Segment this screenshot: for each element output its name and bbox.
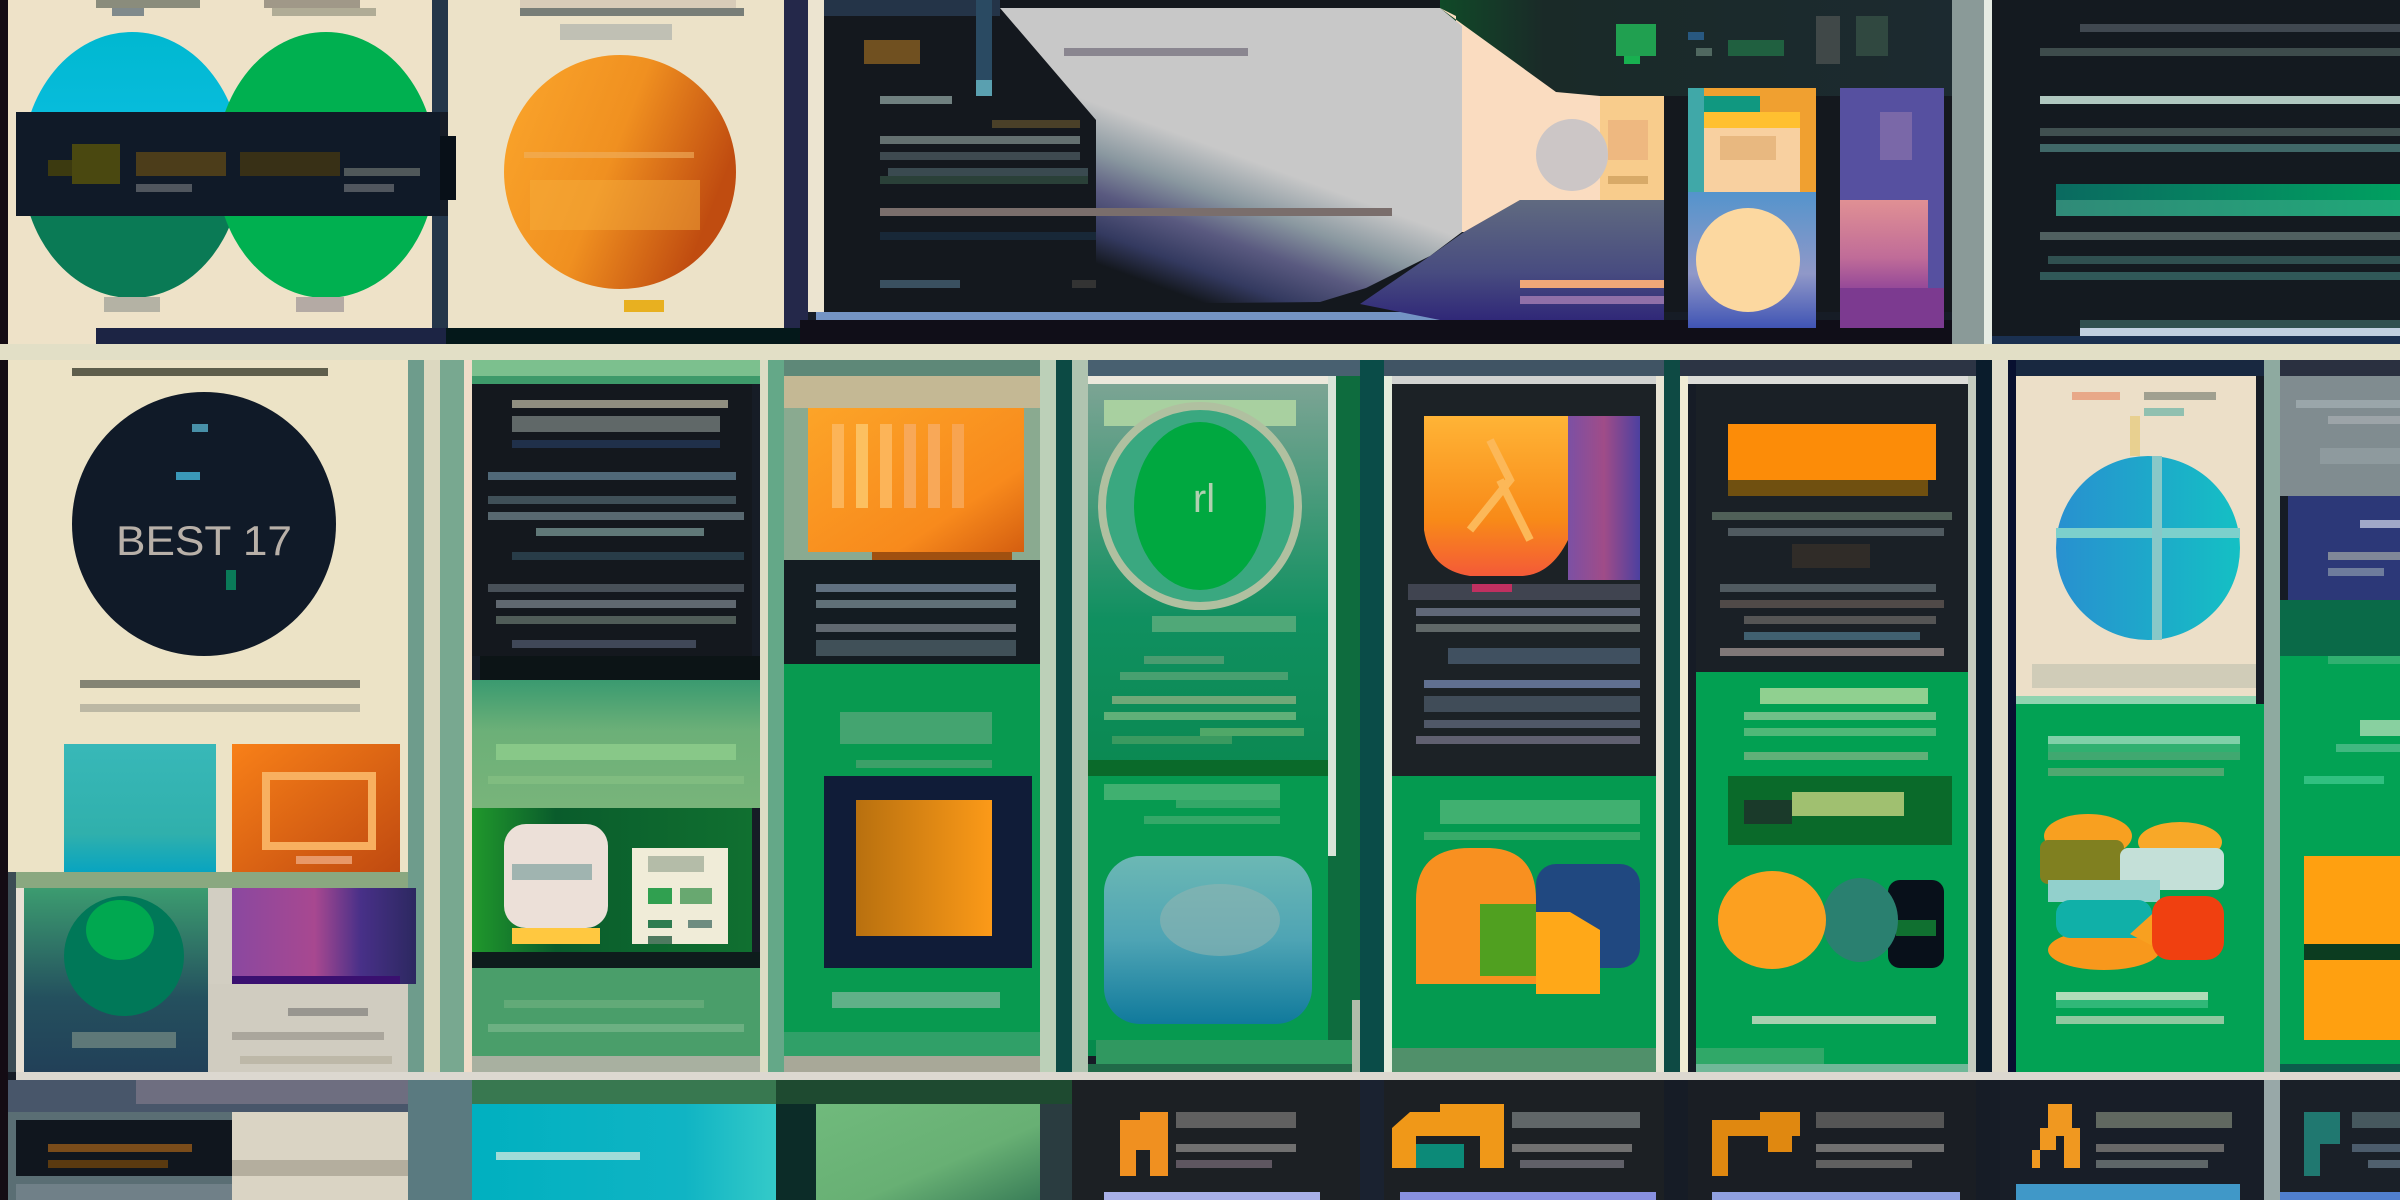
icon: green circle: [216, 32, 436, 298]
top toolbar icons: [1616, 16, 1888, 64]
heading: [72, 368, 328, 376]
panel: column seven: [2280, 360, 2400, 1072]
orange tile upper: [2304, 856, 2400, 944]
green footer: [472, 968, 760, 1072]
icon: teal glyph: [2304, 1112, 2340, 1176]
green text block: [472, 680, 760, 808]
panel: column six: [2016, 360, 2264, 1072]
top labels: [96, 0, 376, 16]
bottom row: card seven: [2280, 1080, 2400, 1200]
icon: orange lock: [2032, 1104, 2080, 1168]
text lines: [880, 96, 1312, 288]
panel: left poster: [8, 360, 408, 872]
heading bars: [520, 0, 744, 40]
card: purple nebula: [208, 888, 416, 1072]
slate wedge under peach: [1360, 200, 1664, 320]
icon: green gem: [64, 896, 184, 1016]
dark text block: [1696, 384, 1968, 672]
bottom row: cyan card: [472, 1080, 776, 1200]
icon: orange glyph: [1712, 1112, 1800, 1176]
panel: column one: [472, 360, 760, 1072]
bottom row: green card: [776, 1080, 1072, 1200]
card: blue tile with coin: [1688, 192, 1816, 328]
subheading lines: [1104, 784, 1280, 824]
caption dot: [624, 300, 664, 312]
row bar across panel: [880, 208, 1392, 216]
circle captions: [104, 297, 344, 312]
icon: three discs: [1718, 871, 1944, 969]
card: teal orange tile: [1688, 88, 1816, 192]
orange tile lower: [2304, 960, 2400, 1040]
dark green illustration: [472, 808, 752, 952]
panel: overlapping circles: [8, 0, 456, 344]
card: green gem: [16, 888, 208, 1072]
orange bar: [1728, 424, 1936, 480]
orange tile: [808, 408, 1024, 560]
text lines: [1744, 688, 1936, 760]
icon: flowing blob: [2040, 814, 2224, 970]
bottom row: card three: [1072, 1080, 1360, 1200]
cream band: [0, 344, 2400, 360]
panel: column three: [1088, 360, 1360, 1072]
icon: small badge: [864, 40, 920, 64]
icon: navy badge circle: BEST 17: [116, 517, 292, 564]
caption lines: [2056, 992, 2224, 1024]
card: purple tile: [1840, 88, 1944, 328]
green highlight bar: [2056, 184, 2400, 216]
bottom row: card five: [1688, 1080, 1976, 1200]
green block: [784, 664, 1040, 1056]
icon: green shield: rl: [1193, 477, 1215, 521]
icon: bottle: [504, 824, 608, 944]
panel: orange sphere: [440, 0, 784, 328]
purple side panel: [1568, 416, 1640, 580]
vertical rails: [1952, 0, 1992, 344]
dark block: [1392, 384, 1656, 776]
green block: [1696, 672, 1968, 1064]
icon: orange arch: [1392, 1104, 1504, 1168]
bottom row: card four: [1384, 1080, 1664, 1200]
icon: paper table: [632, 848, 728, 944]
tile: orange: [232, 744, 400, 872]
green button: [1728, 776, 1952, 845]
dark text block: [784, 560, 1040, 664]
icon: navy badge circle: [72, 392, 336, 656]
icon: glass globe: [1104, 856, 1312, 1024]
navy card: [2288, 496, 2400, 600]
divider bar: [96, 320, 2000, 344]
icon: orange shield: [1424, 416, 1568, 576]
gray lines: [2296, 400, 2400, 464]
accent bar: [976, 0, 992, 96]
green block: [1392, 776, 1656, 1048]
panel: right dark text panel: [1992, 0, 2400, 344]
icon: blue globe: [2056, 456, 2240, 640]
strip above cards: [16, 872, 408, 888]
icon: peach coin: [1696, 208, 1800, 312]
orange framed tile: [824, 776, 1032, 968]
icon: green shield: [1102, 400, 1298, 606]
green block: [2280, 600, 2400, 1064]
text lines: [1104, 616, 1304, 744]
angled light panel: [1000, 8, 1462, 304]
bottom row: left cards: [8, 1080, 472, 1200]
peach wedge: [1440, 8, 1664, 232]
panel: column four: [1384, 360, 1664, 1072]
text lines: [2304, 656, 2400, 784]
banner with title: [16, 112, 456, 216]
tile: teal: [64, 744, 216, 872]
dark header strip: [1440, 0, 1960, 96]
panel: column two: [784, 360, 1040, 1072]
heading bars: [2072, 392, 2216, 456]
panel: main dark window: [808, 0, 1960, 320]
icon: orange symbol: [1120, 1112, 1168, 1176]
bottom row: card six: [2000, 1080, 2264, 1200]
panel heading: [1064, 48, 1248, 56]
icon: teal circle: [22, 32, 242, 298]
caption lines: [80, 680, 360, 712]
text lines: [2048, 736, 2240, 776]
card: peach portrait: [1536, 96, 1664, 200]
orange and purple stripes: [1520, 280, 1664, 304]
text lines: [1408, 584, 1640, 744]
panel: column five: [1680, 360, 1976, 1072]
icon: shapes cluster: [1416, 848, 1640, 994]
horizontal rule: [16, 1072, 2400, 1080]
text lines: [1424, 800, 1640, 840]
left rails: [408, 360, 472, 1072]
icon: orange sphere: [504, 55, 736, 289]
dark text block: [472, 384, 752, 656]
